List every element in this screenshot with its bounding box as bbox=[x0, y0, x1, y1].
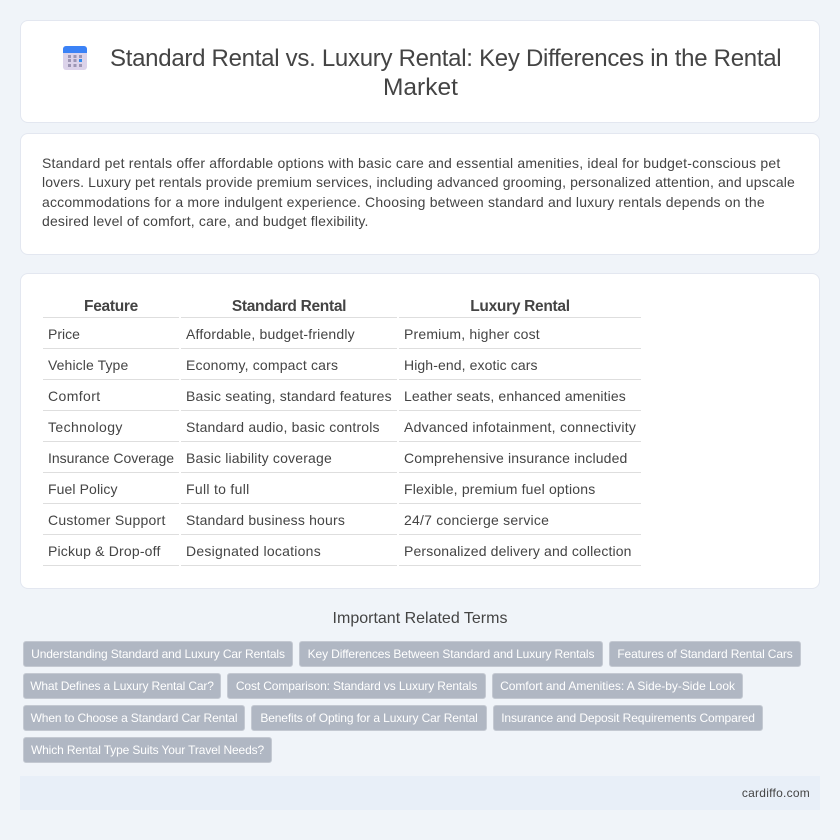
table: Affordable, budget-friendly bbox=[186, 326, 355, 342]
table: Personalized delivery and collection bbox=[404, 542, 632, 558]
related term tags: Features of Standard Rental Cars bbox=[617, 647, 793, 661]
related term tags: Key Differences Between Standard and Luxury Rentals bbox=[308, 647, 594, 661]
related term tags: Which Rental Type Suits Your Travel Needs? bbox=[31, 743, 264, 757]
title bbox=[110, 45, 781, 101]
table: Standard business hours bbox=[186, 512, 345, 528]
header row: Feature bbox=[84, 298, 138, 315]
related term tags: Comfort and Amenities: A Side-by-Side Look bbox=[500, 679, 735, 693]
title: Standard Rental vs. Luxury Rental: Key Differences in the Rental bbox=[110, 45, 781, 72]
table: Basic seating, standard features bbox=[186, 388, 392, 404]
related term tags: What Defines a Luxury Rental Car? bbox=[30, 679, 214, 693]
table: Designated locations bbox=[186, 542, 321, 558]
header row: Standard Rental bbox=[232, 298, 346, 315]
related term tags bbox=[23, 641, 801, 763]
related term tags: Cost Comparison: Standard vs Luxury Rentals bbox=[236, 679, 477, 693]
table bbox=[43, 298, 641, 566]
panel: description bbox=[20, 133, 820, 255]
description text bbox=[42, 155, 795, 229]
table: Leather seats, enhanced amenities bbox=[404, 388, 626, 404]
table: Fuel Policy bbox=[48, 480, 118, 496]
table: Vehicle Type bbox=[48, 356, 128, 372]
description text: accommodations for a more indulgent experience. Choosing between standard and luxury rentals depends on the bbox=[42, 194, 765, 210]
related term tags: Understanding Standard and Luxury Car Rentals bbox=[31, 647, 285, 661]
table: Pickup & Drop-off bbox=[48, 542, 161, 558]
icon: calendar bbox=[63, 46, 87, 70]
description text: Standard pet rentals offer affordable options with basic care and essential amenities, ideal for budget-conscious pet bbox=[42, 155, 780, 171]
table: Economy, compact cars bbox=[186, 356, 338, 372]
table: Price bbox=[48, 326, 80, 342]
footer site name: cardiffo.com bbox=[742, 786, 810, 800]
title: Market bbox=[383, 74, 458, 101]
table: Premium, higher cost bbox=[404, 326, 540, 342]
header row bbox=[84, 298, 570, 315]
panel: comparison table bbox=[20, 273, 820, 589]
table: 24/7 concierge service bbox=[404, 512, 549, 528]
related term tags: When to Choose a Standard Car Rental bbox=[31, 711, 237, 725]
heading: important related terms: Important Related Terms bbox=[333, 610, 507, 627]
table: High-end, exotic cars bbox=[404, 356, 538, 372]
table: Insurance Coverage bbox=[48, 450, 174, 466]
table: Comprehensive insurance included bbox=[404, 450, 627, 466]
table: Basic liability coverage bbox=[186, 450, 332, 466]
table: Flexible, premium fuel options bbox=[404, 480, 595, 496]
related term tags: Insurance and Deposit Requirements Compared bbox=[501, 711, 755, 725]
table: Comfort bbox=[48, 388, 101, 404]
description text: lovers. Luxury pet rentals provide premium services, including advanced grooming, personalized attention, and upscale bbox=[42, 174, 795, 190]
footer bbox=[20, 776, 820, 810]
table: Technology bbox=[48, 418, 123, 434]
description text: desired level of comfort, care, and budget flexibility. bbox=[42, 213, 369, 229]
table: Advanced infotainment, connectivity bbox=[404, 418, 636, 434]
related term tags: Benefits of Opting for a Luxury Car Rental bbox=[260, 711, 478, 725]
table: Full to full bbox=[186, 480, 250, 496]
table: Standard audio, basic controls bbox=[186, 418, 380, 434]
table: Customer Support bbox=[48, 512, 166, 528]
header card bbox=[20, 20, 820, 123]
header row: Luxury Rental bbox=[470, 298, 570, 315]
